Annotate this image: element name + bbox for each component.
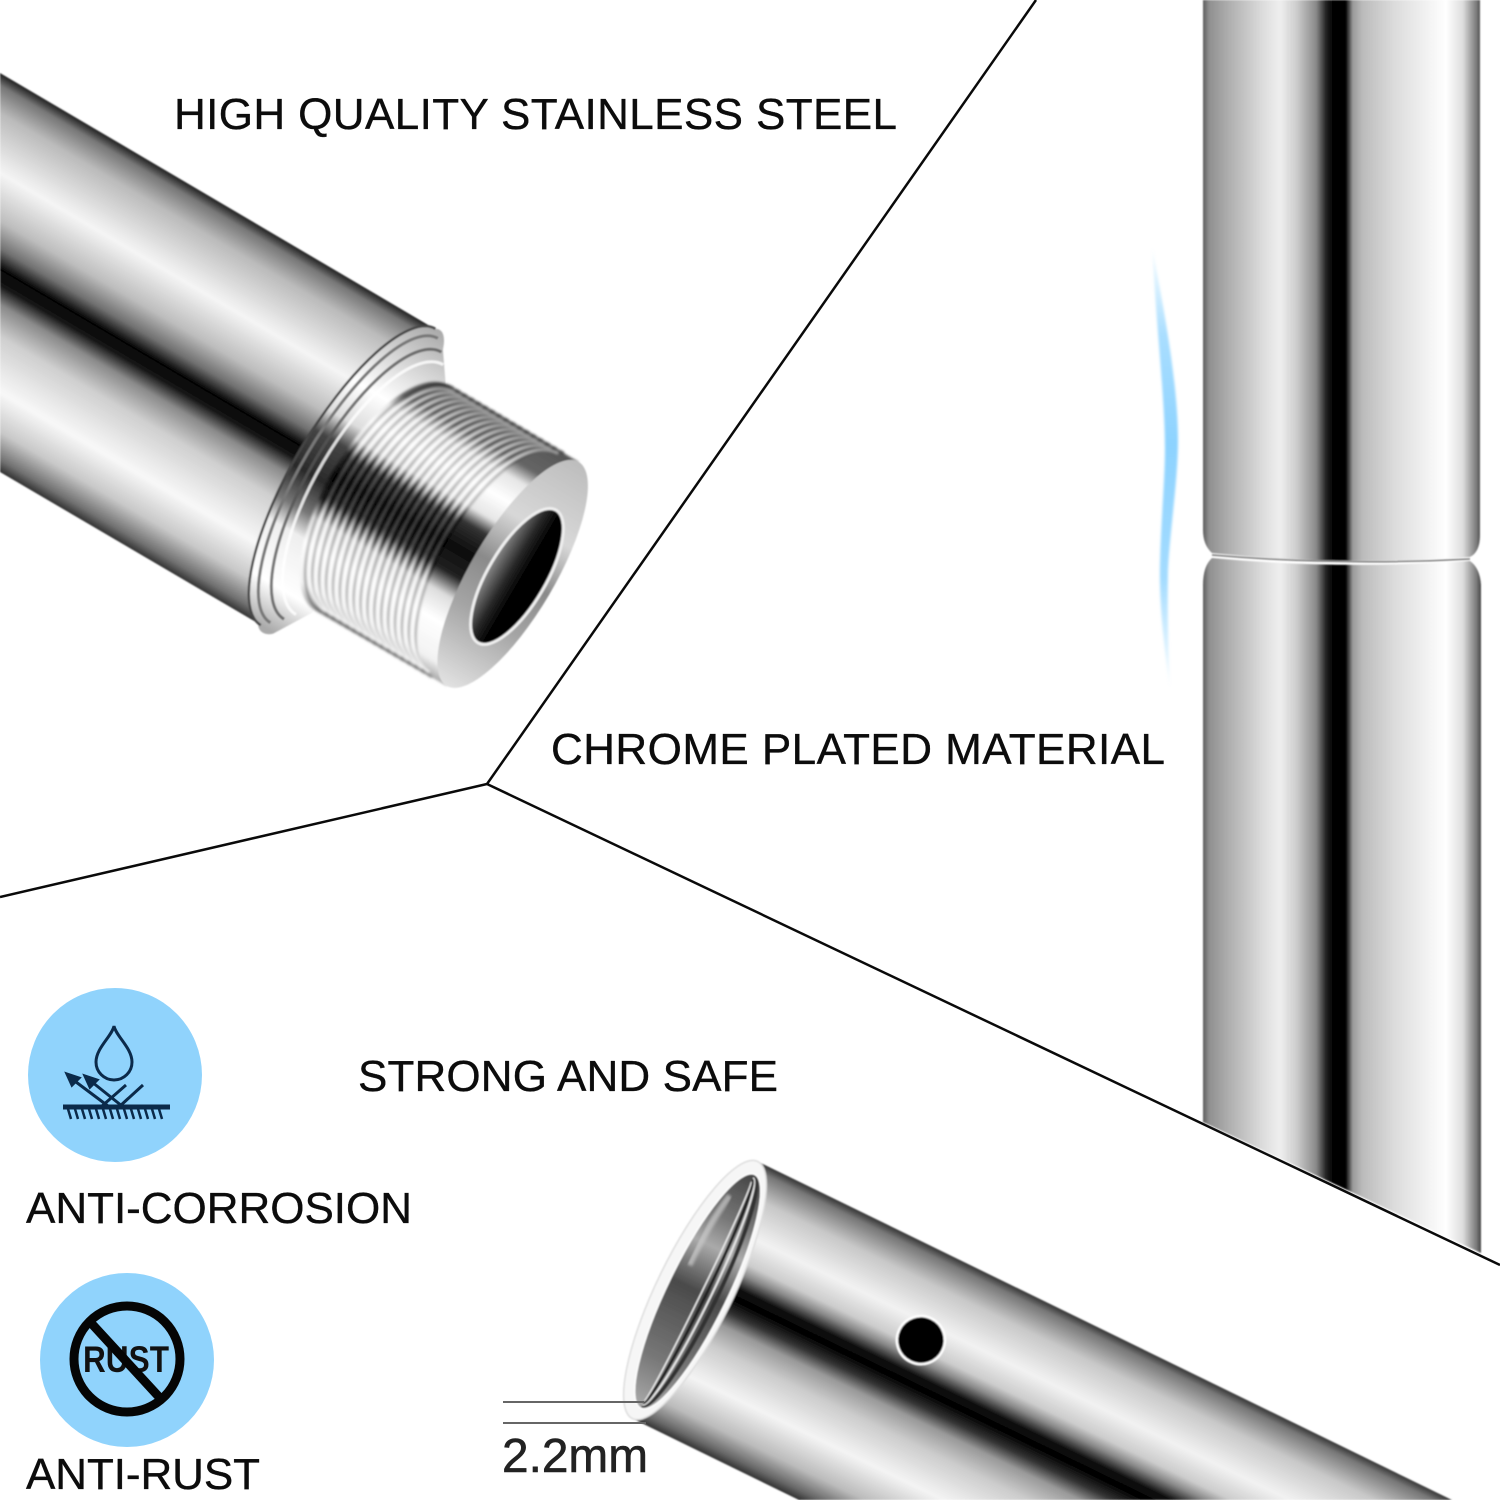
label: anti-corrosion: ANTI-CORROSION (26, 1184, 412, 1233)
blue flexibility swoosh (1152, 245, 1178, 690)
heading: strong and safe: STRONG AND SAFE (358, 1052, 778, 1101)
lower segment (1203, 558, 1481, 1253)
icon: anti-rust (40, 1273, 214, 1447)
tube body (0, 73, 435, 625)
label: anti-rust: ANTI-RUST (26, 1450, 260, 1499)
heading: chrome plated: CHROME PLATED MATERIAL (551, 725, 1165, 774)
threaded bore interior (614, 1161, 782, 1421)
tube body (632, 1161, 1452, 1500)
tube opening (598, 1145, 981, 1500)
threaded end (209, 299, 637, 748)
protected surface (63, 1107, 170, 1119)
upper segment (1203, 0, 1480, 561)
repelled arrows (67, 1074, 143, 1106)
drilled hole (889, 1308, 953, 1372)
icon: anti-corrosion (28, 988, 202, 1162)
heading: stainless steel: HIGH QUALITY STAINLESS STEEL (174, 90, 897, 139)
prohibition sign (74, 1306, 180, 1412)
bottom steel tube (598, 1145, 1452, 1500)
thread end face (410, 441, 615, 707)
rust word: RUST (83, 1339, 169, 1380)
wall thickness dimension (502, 1402, 648, 1483)
dimension lines (503, 1402, 646, 1423)
water drop (96, 1026, 132, 1080)
bore opening (453, 495, 581, 658)
flange ring (209, 299, 469, 649)
joint seam (1212, 555, 1470, 562)
vertical chrome tube (1203, 0, 1481, 1253)
tube rim (598, 1145, 792, 1435)
screw thread (267, 357, 579, 688)
dimension value: 2.2mm (502, 1430, 648, 1483)
threaded steel tube (0, 73, 637, 748)
